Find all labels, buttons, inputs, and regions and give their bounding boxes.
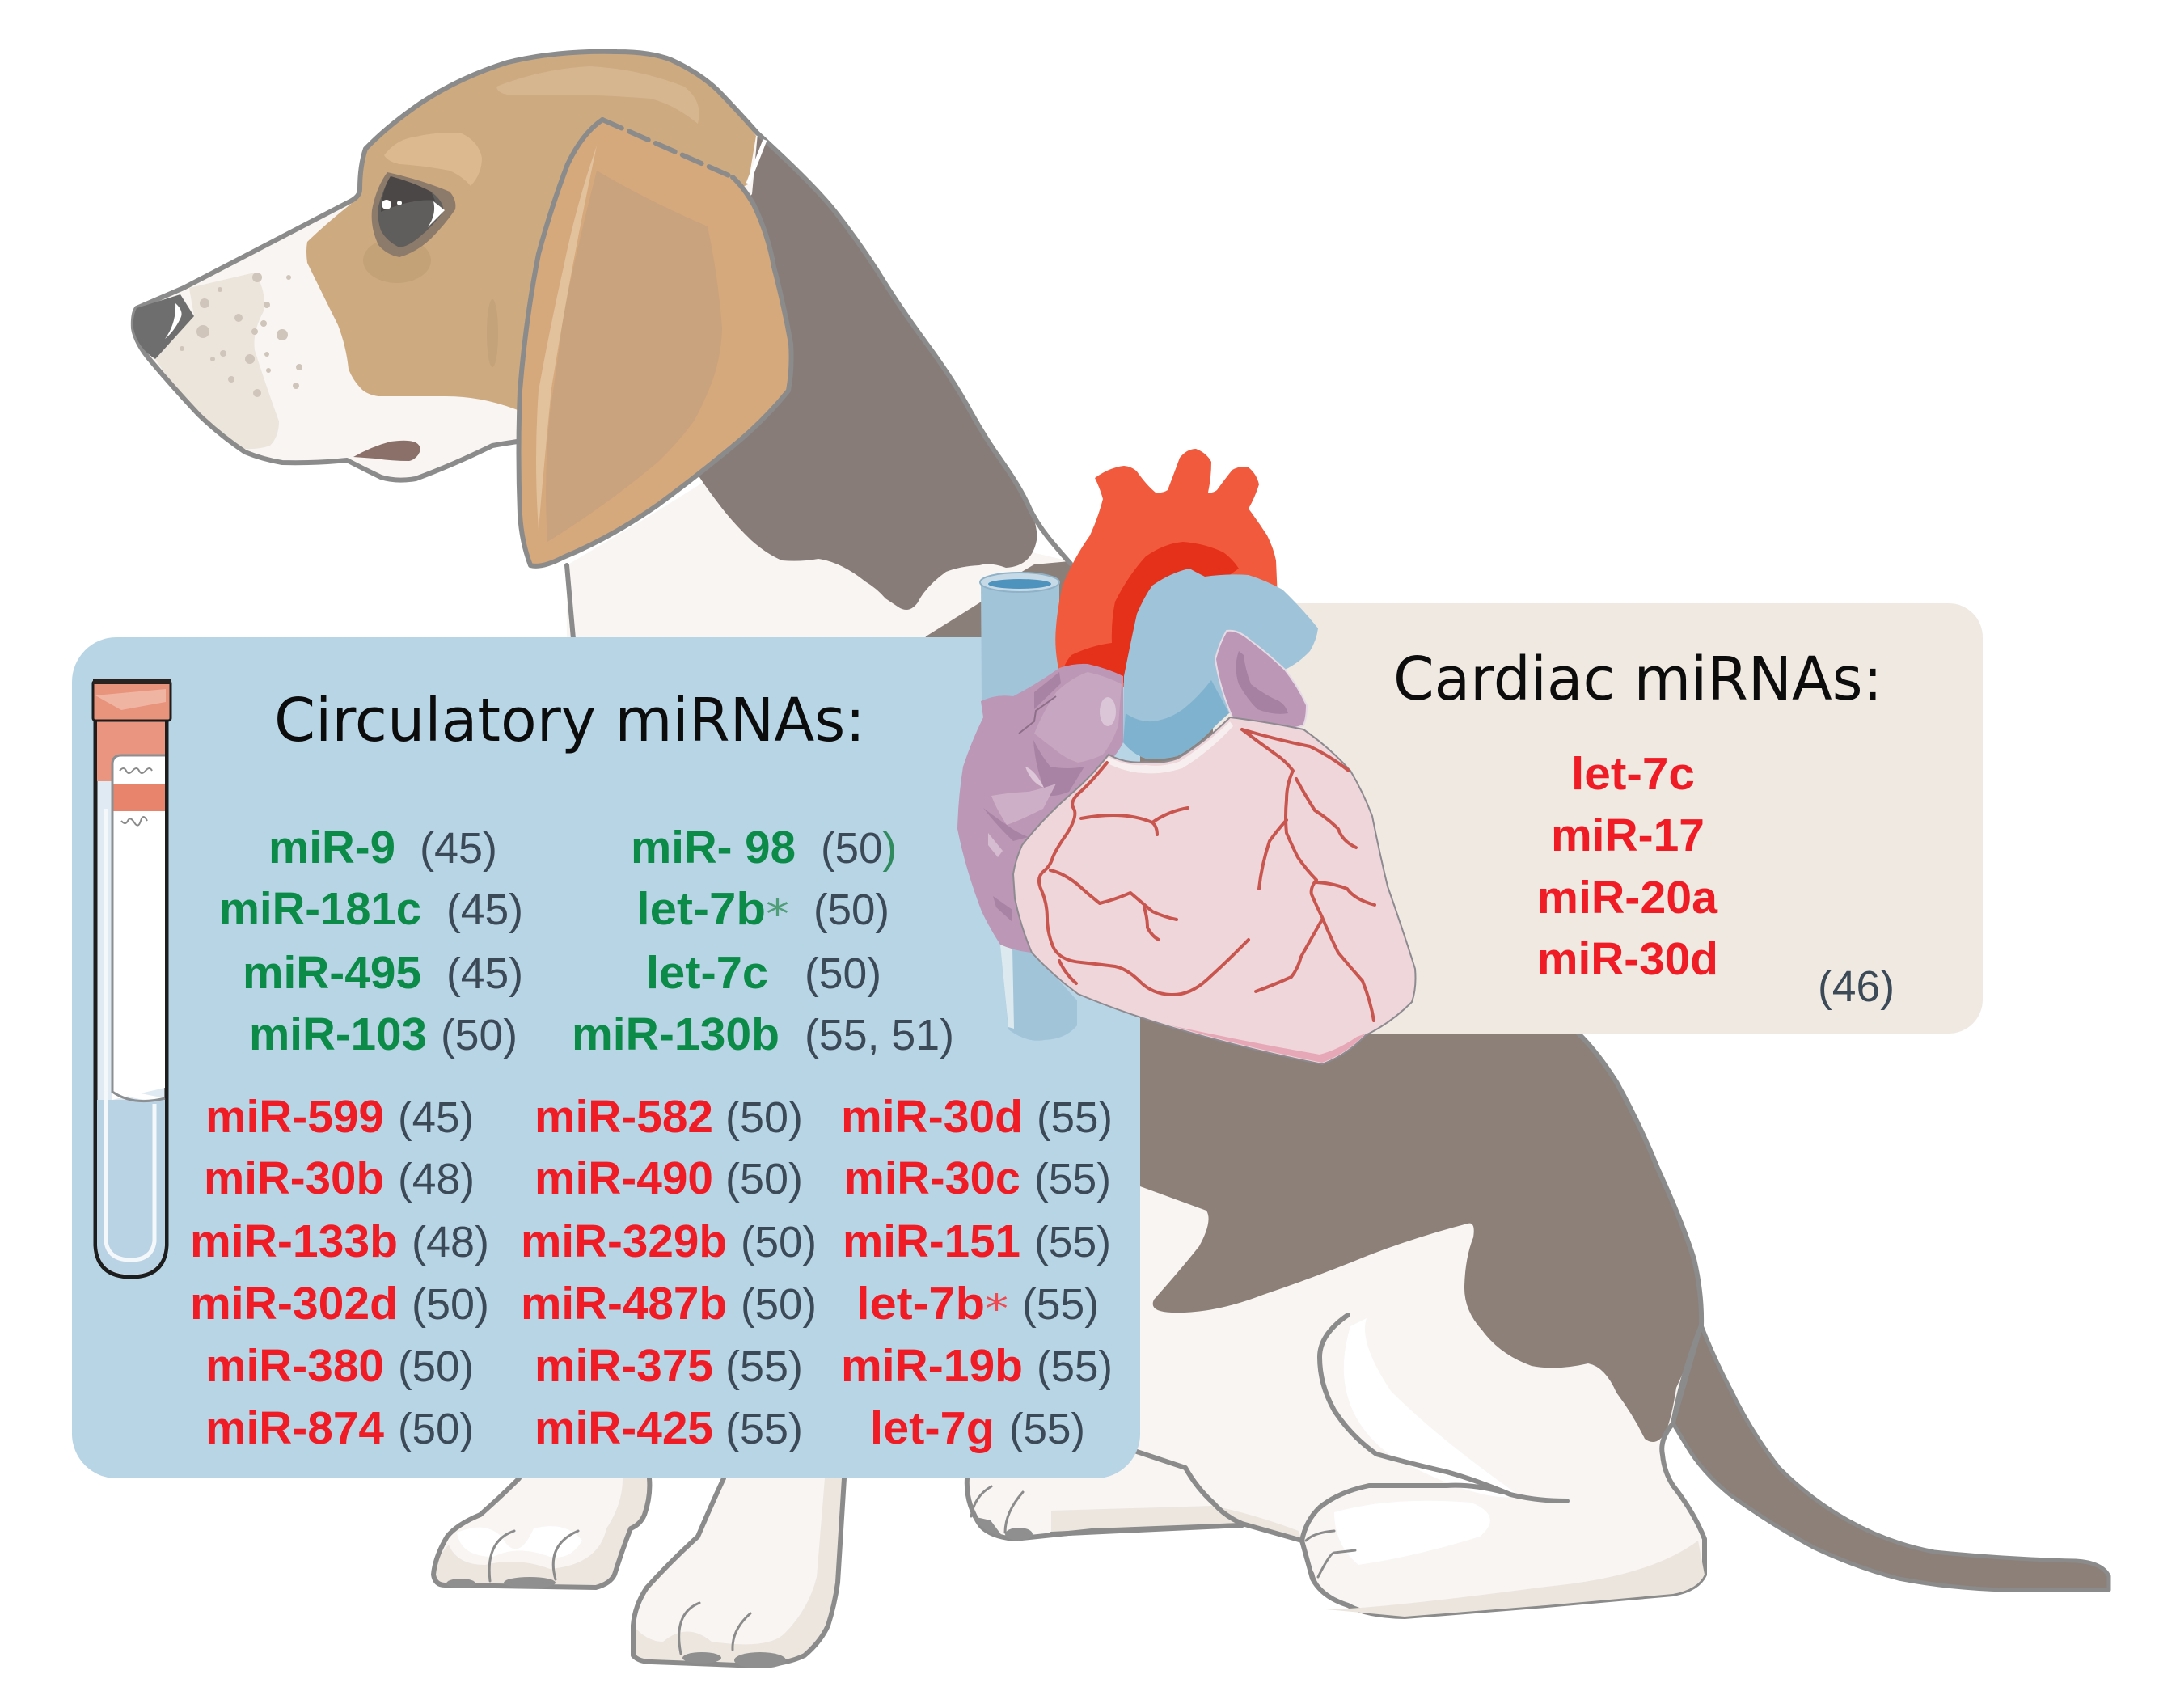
upregulated miRNAs: second red column: (50) (741, 1218, 817, 1266)
upregulated miRNAs: third red column: * (985, 1287, 1008, 1332)
cardiac miRNA list (1537, 748, 1895, 1011)
dog body silhouette (566, 477, 1705, 1617)
dog neck dark patch (615, 133, 1037, 610)
cardiac miRNA list: miR-30d (1537, 933, 1718, 985)
heading: circulatory miRNAs: Circulatory miRNAs: (274, 686, 865, 755)
downregulated miRNAs: first green column: (45) (446, 886, 523, 934)
right atrium (957, 664, 1123, 953)
downregulated miRNAs: second green column: let-7b (636, 883, 766, 935)
downregulated miRNAs: first green column: miR-103 (249, 1008, 427, 1060)
upregulated miRNAs: first red column: miR-599 (205, 1091, 384, 1143)
upregulated miRNAs: second red column: (50) (725, 1155, 803, 1203)
dog back dark coat patch (1051, 561, 1701, 1442)
upregulated miRNAs: first red column: (48) (412, 1218, 489, 1266)
upregulated miRNAs: first red column: (48) (398, 1155, 475, 1203)
downregulated miRNAs: second green column (572, 822, 954, 1060)
downregulated miRNAs: first green column: (50) (441, 1011, 518, 1059)
downregulated miRNAs: first green column: miR-9 (268, 822, 395, 873)
upregulated miRNAs: first red column: (50) (398, 1342, 474, 1391)
illustration: anatomical heart (957, 449, 1415, 1064)
aorta (1055, 449, 1278, 687)
downregulated miRNAs: first green column: miR-495 (243, 947, 421, 999)
upregulated miRNAs: second red column: (50) (741, 1280, 817, 1329)
upregulated miRNAs: first red column: miR-133b (190, 1215, 398, 1267)
upregulated miRNAs: third red column: miR-30d (841, 1091, 1023, 1143)
cardiac miRNA list: miR-20a (1537, 872, 1718, 924)
dog rear leg outlines (1051, 1315, 1705, 1617)
upregulated miRNAs: third red column: (55) (1034, 1155, 1111, 1203)
aorta inner wall (1061, 542, 1239, 683)
dog front paw right (633, 1478, 844, 1668)
cardiac miRNA list: let-7c (1571, 748, 1695, 800)
dog under-eye shadow (363, 238, 431, 283)
dog muzzle outline (133, 52, 758, 480)
cardiac miRNA list: miR-17 (1551, 810, 1705, 861)
upregulated miRNAs: second red column: miR-487b (521, 1278, 727, 1330)
downregulated miRNAs: first green column: miR-181c (219, 883, 421, 935)
downregulated miRNAs: first green column: (45) (420, 824, 497, 873)
dog nose (133, 294, 194, 359)
dog muzzle freckles (180, 273, 302, 397)
inferior vena cava (1000, 942, 1077, 1041)
upregulated miRNAs: third red column: let-7b (856, 1278, 985, 1330)
dog collar highlight (748, 140, 765, 184)
upregulated miRNAs: first red column: miR-302d (190, 1278, 398, 1330)
upregulated miRNAs: first red column: miR-30b (204, 1152, 384, 1204)
upregulated miRNAs: second red column: (50) (725, 1093, 803, 1142)
icon: blood collection tube (93, 679, 171, 1277)
dog back and chest outline (567, 133, 1705, 1617)
upregulated miRNAs: second red column: miR-582 (534, 1091, 713, 1143)
dog eye (372, 172, 455, 257)
heading: cardiac miRNAs: Cardiac miRNAs: (1393, 645, 1882, 714)
upregulated miRNAs: third red column: (55) (1037, 1093, 1113, 1142)
dog muzzle speckled patch (155, 273, 279, 449)
upregulated miRNAs: third red column: (55) (1034, 1218, 1111, 1266)
downregulated miRNAs: first green column: (45) (446, 949, 523, 998)
ventricle (1013, 717, 1415, 1064)
upregulated miRNAs: second red column: miR-329b (521, 1215, 727, 1267)
upregulated miRNAs: third red column (841, 1091, 1113, 1454)
upregulated miRNAs: first red column: miR-380 (205, 1340, 384, 1392)
coronary vessels (1039, 729, 1375, 1021)
dog front paw left (433, 1478, 649, 1588)
upregulated miRNAs: first red column: miR-874 (205, 1402, 384, 1454)
upregulated miRNAs: second red column: miR-490 (534, 1152, 713, 1204)
downregulated miRNAs: second green column: let-7c (646, 947, 768, 999)
dog skull light patch (496, 66, 699, 124)
downregulated miRNAs: second green column: * (766, 892, 789, 937)
upregulated miRNAs: third red column: (55) (1037, 1342, 1113, 1391)
dog skull tan fur (306, 52, 756, 421)
panel: cardiac miRNAs (1213, 603, 1983, 1034)
dog head base (133, 52, 758, 480)
superior vena cava (980, 573, 1059, 704)
upregulated miRNAs: first red column (190, 1091, 489, 1454)
downregulated miRNAs: first green column (219, 822, 523, 1060)
upregulated miRNAs: third red column: (55) (1022, 1280, 1099, 1329)
upregulated miRNAs: third red column: miR-30c (844, 1152, 1020, 1204)
upregulated miRNAs: first red column: (45) (398, 1093, 474, 1142)
dog ear (519, 120, 792, 566)
upregulated miRNAs: second red column: (55) (725, 1342, 803, 1391)
upregulated miRNAs: first red column: (50) (412, 1280, 489, 1329)
pulmonary artery (1123, 569, 1318, 759)
downregulated miRNAs: second green column: (55, 51) (805, 1011, 954, 1059)
cardiac miRNA list: (46) (1818, 962, 1895, 1011)
panel: circulatory miRNAs (72, 637, 1140, 1478)
downregulated miRNAs: second green column: (50) (805, 949, 881, 998)
downregulated miRNAs: second green column: (50) (813, 886, 889, 934)
upregulated miRNAs: second red column: miR-375 (534, 1340, 713, 1392)
dog tail (1673, 1325, 2109, 1590)
upregulated miRNAs: third red column: miR-19b (841, 1340, 1023, 1392)
upregulated miRNAs: first red column: (50) (398, 1405, 474, 1453)
dog shoulder dark band (922, 561, 1084, 647)
upregulated miRNAs: second red column: (55) (725, 1405, 803, 1453)
upregulated miRNAs: third red column: (55) (1009, 1405, 1085, 1453)
downregulated miRNAs: second green column: miR- 98 (631, 822, 796, 873)
upregulated miRNAs: third red column: let-7g (870, 1402, 995, 1454)
upregulated miRNAs: second red column: miR-425 (534, 1402, 713, 1454)
left atrium (1215, 631, 1307, 732)
upregulated miRNAs: third red column: miR-151 (843, 1215, 1020, 1267)
dog mouth (353, 441, 420, 461)
dog cheek wrinkle (487, 299, 498, 367)
dog brow light patch (384, 133, 482, 186)
dog hidden rear paw (967, 1478, 1242, 1541)
upregulated miRNAs: second red column (521, 1091, 817, 1454)
downregulated miRNAs: second green column: miR-130b (572, 1008, 780, 1060)
downregulated miRNAs: second green column: (50) (821, 824, 897, 873)
